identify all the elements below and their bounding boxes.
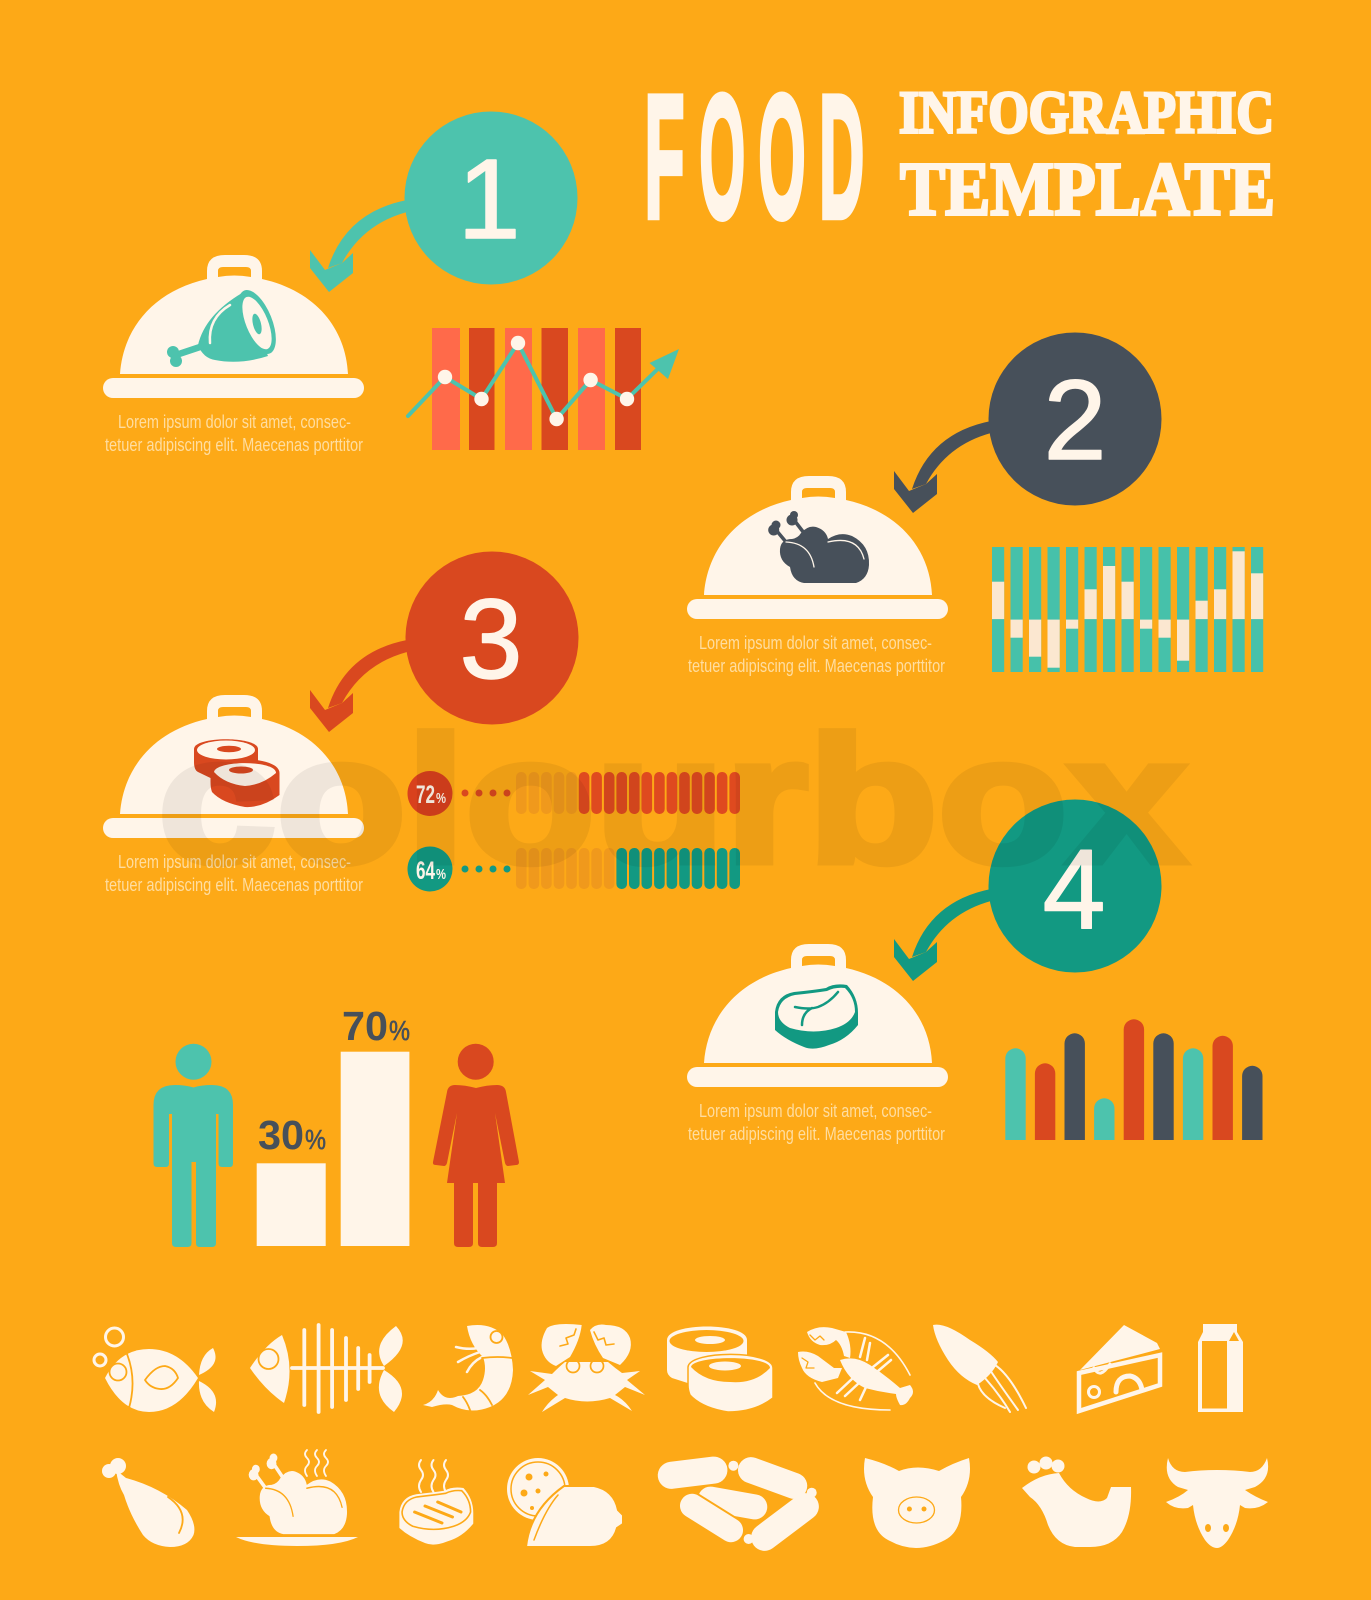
- arrow: step 3 to cloche: [310, 640, 407, 732]
- step 3 number badge: 3: [460, 576, 522, 702]
- label: 30%: %: [305, 1124, 326, 1155]
- arrow: step 2 to cloche: [894, 421, 991, 513]
- icon: steak: [775, 984, 858, 1049]
- cloche 3 caption: Lorem ipsum dolor sit amet, consec-: [118, 852, 351, 872]
- step 2 number badge: 2: [1044, 357, 1106, 483]
- cloche 1 caption: tetuer adipiscing elit. Maecenas porttitor: [105, 435, 363, 455]
- progress row: 64%: [408, 846, 740, 892]
- title word: FOOD: O: [700, 59, 745, 254]
- icon: woman: [433, 1044, 519, 1247]
- icon: cheese: [1079, 1325, 1160, 1411]
- icon: man: [154, 1044, 233, 1247]
- cloche 4 caption: [688, 1101, 945, 1144]
- icon: milk carton: [1198, 1324, 1243, 1412]
- label: 70%: [342, 1003, 410, 1049]
- chart: rounded bars: [1005, 1019, 1262, 1140]
- label: 30%: 30: [258, 1112, 304, 1158]
- icon: lobster: [798, 1327, 913, 1410]
- cloche 2 caption: [688, 633, 945, 676]
- cloche 4 caption: Lorem ipsum dolor sit amet, consec-: [699, 1101, 932, 1121]
- icon: salami: [507, 1458, 623, 1547]
- label: 70%: %: [389, 1015, 410, 1046]
- icon: pig face: [864, 1458, 970, 1548]
- cloche 4 with steak: [687, 944, 948, 1087]
- title word: INFOGRAPHIC: INFOGRAPHIC: [899, 80, 1274, 146]
- title: D: [819, 59, 864, 254]
- arrow: step 1 to cloche: [310, 200, 407, 292]
- title: [644, 59, 1275, 254]
- title word: FOOD: F: [644, 59, 684, 254]
- title: O: [758, 59, 805, 254]
- cloche 2 caption: tetuer adipiscing elit. Maecenas porttitor: [688, 656, 945, 676]
- bar: 70 percent: [341, 1052, 409, 1246]
- icon: squid: [933, 1325, 1026, 1412]
- gender comparison chart: [154, 1003, 519, 1247]
- icon: fish with bubbles: [94, 1328, 216, 1412]
- cloche 4 caption: tetuer adipiscing elit. Maecenas porttitor: [688, 1124, 945, 1144]
- progress row: 64%: %: [436, 866, 446, 883]
- label: 30%: [258, 1112, 326, 1158]
- step 2 number badge: [988, 332, 1162, 506]
- step 1 number badge: 1: [458, 136, 520, 262]
- step 4 number badge: 4: [1043, 826, 1105, 952]
- chart: bars with trend line: [408, 328, 679, 450]
- chart: stacked diverging bars: [992, 547, 1263, 672]
- progress row: 64%: 64: [416, 857, 435, 885]
- icon: cow head: [1166, 1458, 1268, 1548]
- icon: drumstick: [102, 1458, 194, 1547]
- watermark: colourbox: [158, 700, 1186, 901]
- cloche 2 caption: Lorem ipsum dolor sit amet, consec-: [699, 633, 932, 653]
- bar: 30 percent: [257, 1163, 326, 1246]
- icon: ham: [167, 285, 284, 367]
- cloche 3 caption: tetuer adipiscing elit. Maecenas porttitor: [105, 875, 363, 895]
- cloche 2 with chicken: [687, 476, 948, 619]
- icon: roast chicken on plate: [236, 1450, 358, 1546]
- cloche 3 caption: [105, 852, 363, 895]
- icon: fish skeleton: [250, 1325, 403, 1412]
- icon: sausages: [656, 1453, 824, 1556]
- icon: grilled steak: [399, 1460, 473, 1545]
- icon: roast chicken: [768, 511, 869, 583]
- step 3 number badge: [406, 552, 578, 724]
- cloche 1 caption: [105, 412, 363, 455]
- icon: sushi rolls: [194, 739, 280, 807]
- icon: shrimp: [423, 1325, 513, 1411]
- cloche 1 with ham: [103, 255, 364, 398]
- label: 70%: 70: [342, 1003, 388, 1049]
- step 4 number badge: [988, 800, 1162, 972]
- title word: TEMPLATE: TEMPLATE: [900, 148, 1275, 232]
- progress row: 72%: [408, 771, 740, 816]
- progress row: 72%: %: [436, 790, 446, 807]
- cloche 3 with sushi: [103, 695, 364, 838]
- icon: sushi rolls white: [667, 1326, 773, 1412]
- icon: crab: [528, 1324, 645, 1412]
- icon: hen: [1022, 1456, 1131, 1547]
- cloche 1 caption: Lorem ipsum dolor sit amet, consec-: [118, 412, 351, 432]
- progress row: 72%: 72: [416, 781, 435, 809]
- arrow: step 4 to cloche: [894, 889, 991, 981]
- step 1 number badge: [404, 112, 578, 284]
